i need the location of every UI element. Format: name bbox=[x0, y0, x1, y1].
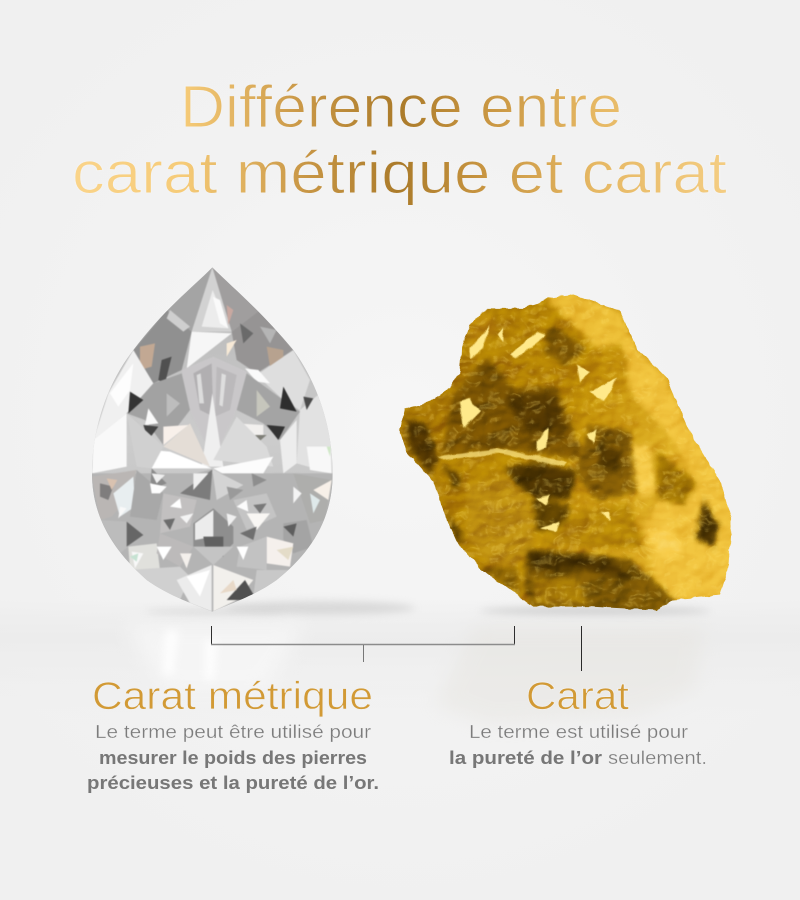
nugget lower-left face bbox=[467, 475, 533, 565]
title bbox=[72, 74, 727, 206]
nugget dark patches bbox=[442, 357, 585, 460]
nugget specular sparkle bbox=[400, 297, 729, 608]
nugget dark base bbox=[523, 548, 677, 613]
text block: carat métrique bbox=[87, 675, 379, 793]
nugget warm colour wash bbox=[436, 294, 732, 601]
nugget highlights bbox=[438, 325, 617, 532]
text block: carat bbox=[449, 675, 707, 768]
line: carat connector bbox=[580, 626, 582, 671]
nugget light right side bbox=[620, 332, 732, 600]
text block: carat: la pureté de l’or bbox=[449, 748, 602, 768]
text block: carat: Carat bbox=[526, 675, 629, 718]
text block: carat métrique: précieuses et la pureté de l’or. bbox=[87, 773, 379, 793]
text block: carat métrique: mesurer le poids des pierres bbox=[99, 748, 367, 768]
diamond centre facets bbox=[127, 357, 300, 485]
text block: carat métrique: Carat métrique bbox=[92, 675, 373, 718]
title: Différence entre bbox=[180, 74, 622, 140]
infographic canvas bbox=[75, 84, 732, 793]
reflections on the surface bbox=[0, 600, 800, 730]
diamond lower facets bbox=[92, 468, 332, 611]
icon: gold nugget bbox=[390, 285, 740, 615]
diamond fine sparkle facets bbox=[107, 305, 331, 593]
icon: pear-cut diamond bbox=[92, 268, 333, 612]
title: carat métrique et carat bbox=[72, 140, 727, 206]
nugget foil texture bbox=[400, 299, 732, 610]
text block: carat métrique: Le terme peut être utilisé pour bbox=[95, 722, 371, 742]
text block: carat: Le terme est utilisé pour bbox=[469, 722, 688, 742]
text block: carat: seulement. bbox=[608, 748, 707, 768]
bracket: carat métrique connector bbox=[211, 626, 515, 662]
diamond top facets bbox=[92, 267, 333, 473]
